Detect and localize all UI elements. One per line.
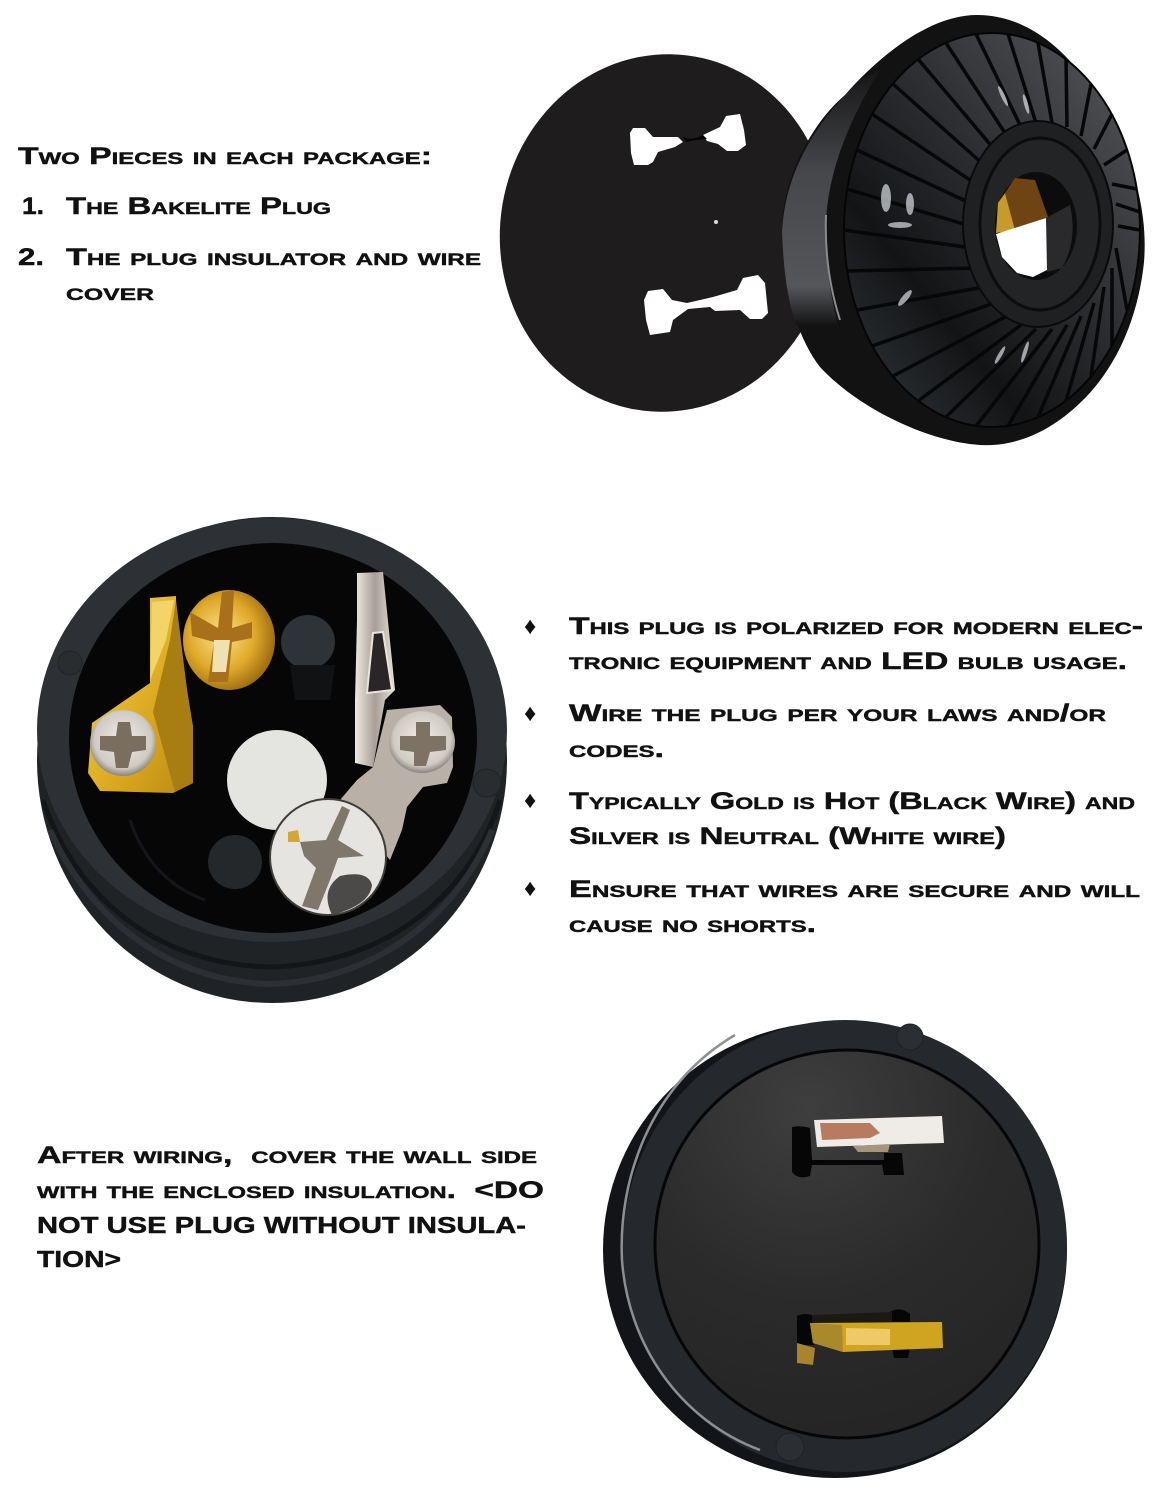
bullet 2: Wire the plug per your laws and/or [569,700,1106,727]
text block: insulation warning: After wiring, cover the wall side [37,1142,537,1169]
bullet 3 [524,787,1135,850]
bullet 4: cause no shorts. [569,911,816,938]
slot: lower [644,275,768,335]
centre wire hole [227,730,327,830]
text block: insulation warning: TION> [37,1246,121,1272]
bullet 4 [524,875,1140,938]
outer body [37,517,507,1003]
list item 1 [22,193,331,220]
bullet 3: Typically Gold is Hot (Black Wire) and [569,788,1135,815]
gold screw [183,590,275,690]
list item 1: The Bakelite Plug [66,193,331,220]
small silver screw [389,711,455,773]
top blade: silver [814,1116,944,1147]
hole with brass blade [995,172,1077,280]
text block: insulation warning: NOT USE PLUG WITHOUT INSULA- [37,1212,526,1238]
text block: package contents [18,143,481,306]
bullet 1 [524,613,1143,675]
text block: insulation warning [37,1142,544,1272]
gold terminal [88,590,275,793]
text block: insulation warning: with the enclosed insulation. <DO [37,1177,544,1204]
bullet 4: Ensure that wires are secure and will [569,876,1140,903]
bullet 2 [524,700,1106,763]
bottom slot [797,1309,910,1358]
inner face [655,1050,1039,1438]
bullet 1: ♦ [524,613,536,640]
radial ribs [844,34,1140,426]
slot: upper [630,114,746,165]
bullet list: wiring notes [524,613,1143,938]
dark pegs [281,615,335,669]
peg marks on rim [58,651,82,675]
bullet 4: ♦ [524,875,536,902]
glossy highlights [881,85,1031,365]
silver screw on gold terminal [90,710,156,776]
rim peg marks [897,1024,923,1050]
list item 1: 1. [22,193,44,220]
bullet 1: tronic equipment and LED bulb usage. [569,648,1127,675]
list item 2: The plug insulator and wire [66,244,481,271]
ribbed dome [844,33,1140,427]
bullet 2: codes. [569,736,664,763]
plug body outline [782,15,1145,445]
heading: two pieces: Two Pieces in each package: [18,143,432,170]
photo: plug wall side [603,1020,1067,1478]
bullet 3: Silver is Neutral (White wire) [569,823,1006,850]
bullet 3: ♦ [524,787,536,814]
list item 2: cover [66,279,154,306]
centre hub [963,121,1113,327]
bottom blade: gold [810,1322,943,1352]
plug side wall [782,70,880,325]
bullet 2: ♦ [524,700,536,727]
bullet 1: This plug is polarized for modern elec- [569,613,1143,640]
silver terminal [270,572,455,915]
photo: bakelite plug front [782,15,1145,445]
photo: open plug wiring side [37,517,507,1003]
top slot [792,1126,904,1177]
rim highlight [826,215,840,320]
inner cavity [69,543,477,933]
large silver screw [270,799,386,915]
list item 2: 2. [18,244,44,271]
list item 2 [18,244,481,306]
photo: felt insulator disc [479,35,851,431]
